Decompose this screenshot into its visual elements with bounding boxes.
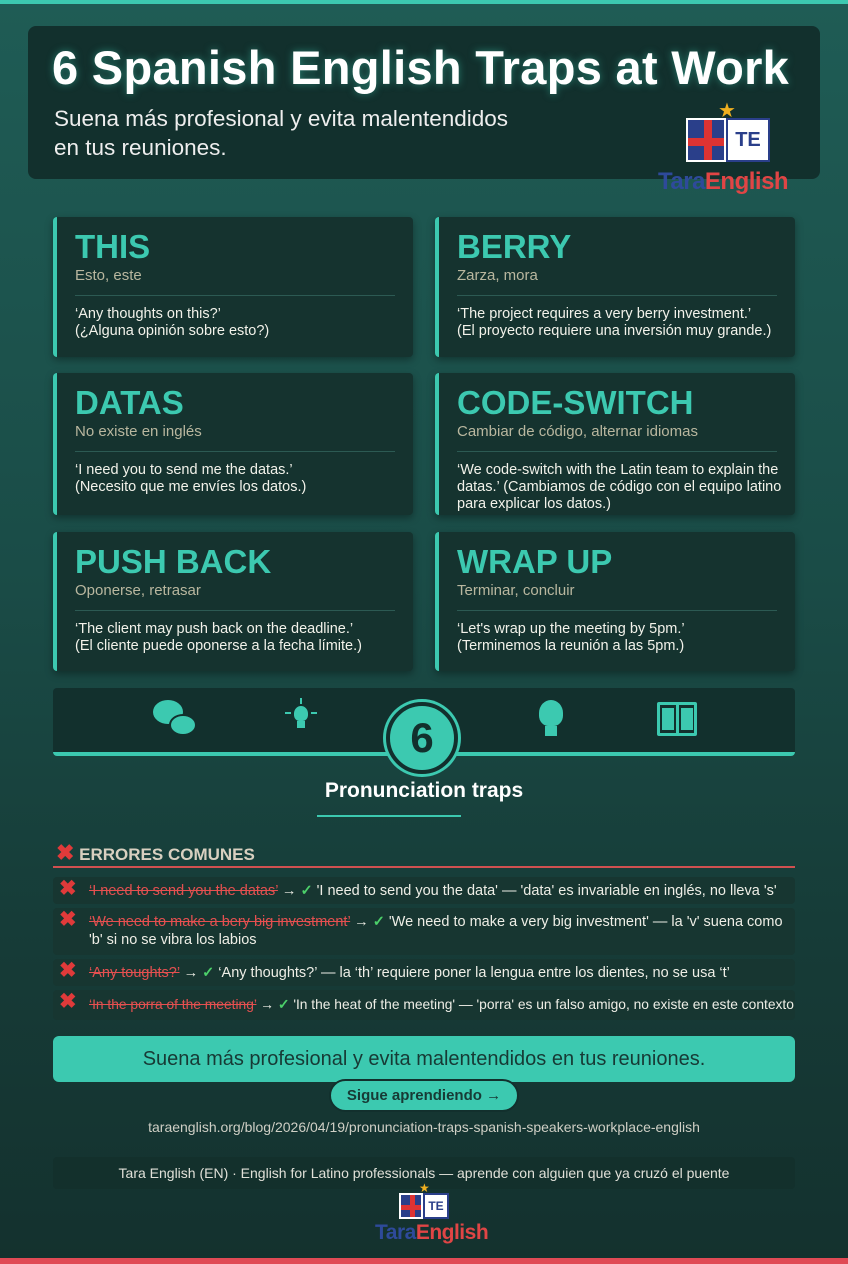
number badge 6: [386, 702, 458, 774]
icon: open book: [657, 702, 697, 736]
CTA banner: [53, 1036, 795, 1082]
card: DATAS: (Necesito que me envíes los datos.): [75, 479, 306, 495]
card: PUSH BACK: Oponerse, retrasar: [75, 582, 201, 599]
card: PUSH BACK: ‘The client may push back on the deadline.’: [75, 621, 353, 637]
error row 1: [53, 877, 795, 904]
logo: TaraEnglish header: TE: [735, 129, 761, 151]
card: BERRY: BERRY: [457, 228, 571, 265]
card: PUSH BACK: [53, 532, 413, 671]
icon: chat bubbles: [153, 700, 195, 734]
card: THIS: Esto, este: [75, 267, 142, 284]
logo: footer: [375, 1181, 488, 1244]
footer strip: Tara English (EN) · English for Latino professionals — aprende con alguien que ya cruzó el puente: [119, 1165, 729, 1181]
card: PUSH BACK: (El cliente puede oponerse a la fecha límite.): [75, 638, 362, 654]
title: 6 Spanish English Traps at Work: [52, 41, 789, 94]
heading: errores comunes: ✖ ERRORES COMUNES: [56, 840, 255, 865]
card: THIS: (¿Alguna opinión sobre esto?): [75, 323, 269, 339]
heading: pronunciation traps: Pronunciation traps: [325, 779, 523, 802]
card: WRAP UP: (Terminemos la reunión a las 5pm.): [457, 638, 684, 654]
logo: footer: TaraEnglish: [375, 1221, 488, 1244]
icon: lightbulb: [539, 700, 563, 736]
card: BERRY: (El proyecto requiere una inversión muy grande.): [457, 323, 771, 339]
header panel: [28, 26, 820, 179]
number badge 6: 6: [410, 714, 434, 761]
card: BERRY: [435, 217, 795, 357]
card: CODE-SWITCH: Cambiar de código, alternar idiomas: [457, 423, 698, 440]
logo: TaraEnglish header: ★: [718, 100, 736, 122]
url: taraenglish.org/blog/2026/04/19/pronunciation-traps-spanish-speakers-workplace-english: [148, 1119, 700, 1135]
icon bar: [53, 688, 795, 756]
button: sigue aprendiendo: [329, 1079, 519, 1112]
icon: lightbulb rays: [285, 698, 317, 728]
card: THIS: [53, 217, 413, 357]
logo: TaraEnglish header: TaraEnglish: [658, 168, 788, 195]
card: WRAP UP: ‘Let's wrap up the meeting by 5pm.’: [457, 621, 685, 637]
subtitle: [54, 106, 508, 160]
card: THIS: THIS: [75, 228, 150, 265]
card: DATAS: ‘I need you to send me the datas.’: [75, 462, 293, 478]
card: PUSH BACK: PUSH BACK: [75, 543, 271, 580]
card: CODE-SWITCH: [435, 373, 795, 515]
subtitle: en tus reuniones.: [54, 135, 227, 160]
footer strip: [53, 1157, 795, 1189]
error row 1: ✖: [59, 877, 77, 900]
card: THIS: ‘Any thoughts on this?’: [75, 306, 221, 322]
card: DATAS: No existe en inglés: [75, 423, 202, 440]
card: DATAS: [53, 373, 413, 515]
card: DATAS: DATAS: [75, 384, 184, 421]
subtitle: Suena más profesional y evita malentendidos: [54, 106, 508, 131]
logo: TaraEnglish header: [658, 100, 788, 195]
card: CODE-SWITCH: CODE-SWITCH: [457, 384, 693, 421]
error row 3: [53, 959, 795, 986]
card: WRAP UP: Terminar, concluir: [457, 582, 575, 599]
card: CODE-SWITCH: ‘We code-switch with the Latin team to explain the datas.’ (Cambiamos de código con el equipo latino para explicar los datos.): [457, 462, 781, 512]
error row 4: ‘In the porra of the meeting’ → ✓ 'In the heat of the meeting' — 'porra' es un falso amigo, no existe en este contexto: [89, 997, 794, 1012]
error row 4: [53, 990, 795, 1020]
card: BERRY: Zarza, mora: [457, 267, 538, 284]
error row 4: ✖: [59, 990, 77, 1013]
bottom accent bar: [0, 1258, 848, 1264]
button: sigue aprendiendo: Sigue aprendiendo →: [347, 1087, 501, 1104]
logo: footer: TE: [428, 1199, 444, 1213]
top accent bar: [0, 0, 848, 4]
card: WRAP UP: WRAP UP: [457, 543, 612, 580]
error row 2: ‘We need to make a bery big investment’ → ✓ 'We need to make a very big investment' — la 'v' suena como 'b' si no se vibra los labios: [89, 914, 783, 948]
error row 3: ✖: [59, 959, 77, 982]
error row 1: ‘I need to send you the datas’ → ✓ 'I need to send you the data' — 'data' es invariable en inglés, no lleva 's': [89, 883, 777, 899]
error row 2: [53, 908, 795, 955]
error row 2: ✖: [59, 908, 77, 931]
error row 3: ‘Any toughts?’ → ✓ ‘Any thoughts?’ — la ‘th’ requiere poner la lengua entre los dientes, no se usa ‘t’: [89, 965, 730, 981]
card: WRAP UP: [435, 532, 795, 671]
CTA banner: Suena más profesional y evita malentendidos en tus reuniones.: [143, 1048, 705, 1070]
logo: footer: ★: [419, 1181, 430, 1195]
card: BERRY: ‘The project requires a very berry investment.’: [457, 306, 751, 322]
